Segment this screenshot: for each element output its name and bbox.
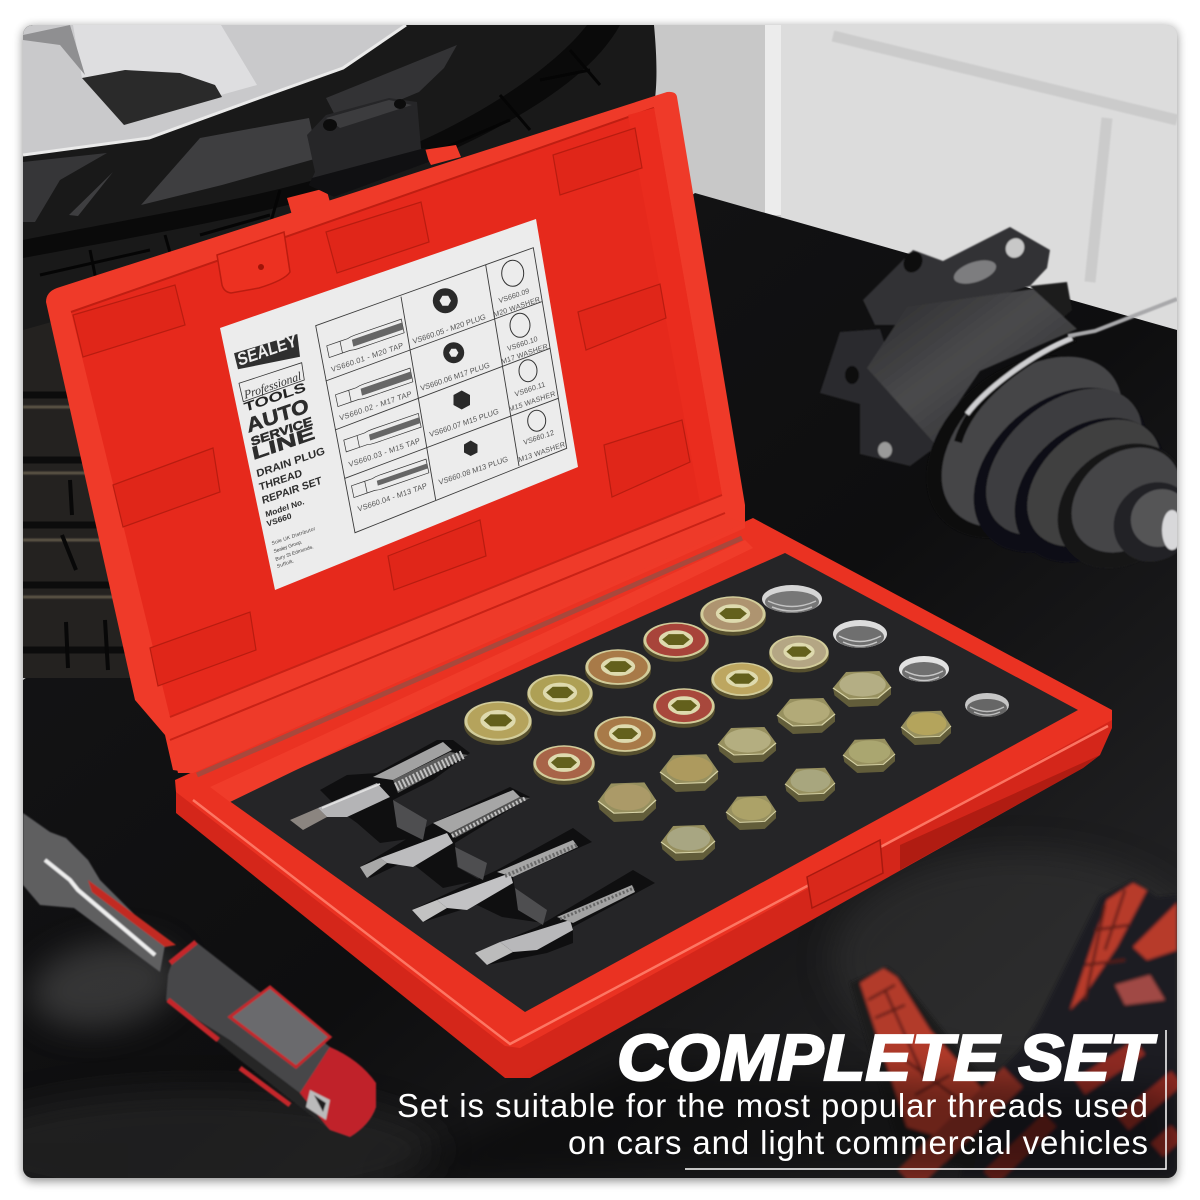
tyre and wheel bbox=[23, 25, 656, 678]
plug captions bbox=[412, 312, 509, 487]
description: on cars and light commercial vehicles bbox=[568, 1124, 1148, 1161]
tap captions: VS660.03 - M15 TAP bbox=[348, 436, 421, 469]
sidewall bands bbox=[141, 118, 318, 205]
product title: THREAD bbox=[258, 468, 304, 494]
tap 1 bbox=[290, 742, 468, 830]
washer captions: M13 WASHER bbox=[518, 439, 566, 464]
Auto Service Line logo bbox=[245, 395, 317, 464]
foam block faces bbox=[393, 800, 547, 925]
handle trim bbox=[168, 942, 290, 1105]
foam insert bbox=[228, 553, 1078, 1012]
distributor text: Sealey Group, bbox=[273, 539, 303, 555]
handle body bbox=[166, 942, 376, 1137]
upper flange bbox=[863, 227, 1050, 325]
red end cap bbox=[300, 1047, 376, 1137]
rim highlights bbox=[193, 726, 1108, 1044]
lower flange bbox=[820, 329, 937, 466]
distributor text bbox=[271, 526, 316, 570]
back flange bbox=[1030, 282, 1072, 320]
right rim highlight bbox=[628, 108, 722, 503]
base right shadow face bbox=[900, 755, 1100, 870]
steel band bbox=[958, 338, 1075, 442]
washer captions: VS660.09 bbox=[498, 286, 530, 305]
table bbox=[23, 193, 1177, 1178]
wrist band bbox=[907, 1077, 1013, 1180]
tap captions bbox=[330, 341, 428, 514]
right red latch stub bbox=[423, 145, 461, 165]
case base bbox=[175, 518, 1112, 1078]
washer captions: M17 WASHER bbox=[500, 341, 548, 366]
distributor text: Bury St Edmunds, bbox=[275, 544, 314, 563]
plug captions: VS660.08 M13 PLUG bbox=[438, 454, 509, 487]
palm knuckle bbox=[1115, 975, 1165, 1005]
plug drawings bbox=[433, 288, 478, 456]
right finger red bbox=[1070, 883, 1147, 1010]
gloves bbox=[850, 880, 1177, 1180]
tap 3 bbox=[412, 840, 578, 922]
palm strips bbox=[1080, 1047, 1177, 1150]
instruction label bbox=[220, 219, 578, 590]
left finger bbox=[850, 967, 990, 1170]
lid shell bbox=[46, 92, 745, 773]
tap pockets bbox=[320, 740, 655, 965]
rim step under lid bbox=[210, 540, 753, 802]
washer captions: VS660.11 bbox=[514, 379, 546, 399]
silver wheel bbox=[23, 25, 406, 155]
tap captions: VS660.02 - M17 TAP bbox=[339, 389, 412, 423]
taps bbox=[290, 742, 635, 965]
handle grip bbox=[230, 987, 330, 1067]
cable tie bbox=[1068, 299, 1177, 336]
label sheet bbox=[220, 219, 578, 590]
plug captions: VS660.05 - M20 PLUG bbox=[412, 312, 487, 346]
hex plugs bbox=[598, 671, 951, 861]
black clasp bbox=[307, 98, 429, 197]
housing bbox=[867, 289, 1077, 446]
plug captions: VS660.07 M15 PLUG bbox=[429, 407, 500, 439]
Professional Tools logo: Professional bbox=[242, 368, 303, 402]
product title: DRAIN PLUG bbox=[256, 446, 326, 480]
base rim top bbox=[175, 518, 1112, 1048]
base latch bbox=[807, 840, 883, 908]
distributor text: Sole UK Distributor bbox=[271, 526, 316, 547]
washer captions: M20 WASHER bbox=[493, 294, 541, 319]
rubber boot bbox=[931, 355, 1177, 562]
tap drawings bbox=[327, 319, 429, 499]
case lid bbox=[46, 92, 753, 802]
tap captions: VS660.04 - M13 TAP bbox=[357, 481, 428, 514]
socket plugs bbox=[464, 596, 829, 785]
base side face bbox=[176, 716, 1112, 1078]
washer drawings bbox=[502, 260, 546, 431]
end cap window bbox=[306, 1090, 330, 1120]
left finger red bbox=[860, 968, 983, 1137]
description: Set is suitable for the most popular threads used bbox=[397, 1087, 1148, 1124]
corner frame bbox=[685, 1030, 1166, 1169]
ratchet bbox=[23, 813, 376, 1137]
lid tab bbox=[217, 232, 290, 293]
handle lower dark bbox=[196, 1019, 328, 1128]
wall bbox=[654, 25, 1177, 330]
CV joint bbox=[820, 226, 1177, 562]
washer captions: M15 WASHER bbox=[508, 389, 556, 414]
Auto Service Line logo: SERVICE bbox=[249, 414, 314, 449]
Auto Service Line logo: AUTO bbox=[245, 395, 311, 438]
bottom-left table tone bbox=[23, 1090, 422, 1178]
caption shade bbox=[380, 1060, 1177, 1178]
lid recesses bbox=[73, 128, 690, 686]
tread lines bbox=[23, 25, 620, 258]
table sheen bbox=[836, 855, 1128, 1060]
tap 2 bbox=[360, 790, 530, 878]
Professional Tools logo bbox=[239, 363, 308, 415]
parts grid bbox=[316, 248, 567, 533]
SEALEY logo: SEALEY bbox=[236, 330, 298, 370]
thread holes bbox=[762, 585, 1009, 717]
washer captions: VS660.10 bbox=[506, 334, 538, 353]
tyre body bbox=[23, 25, 656, 330]
Professional Tools logo: TOOLS bbox=[243, 379, 308, 415]
washer captions: VS660.12 bbox=[523, 428, 555, 447]
hinge glass strip bbox=[197, 538, 742, 775]
washer captions bbox=[493, 286, 566, 464]
heading: COMPLETE SET bbox=[617, 1021, 1158, 1094]
glove palm bbox=[982, 881, 1177, 1178]
chrome head bbox=[23, 813, 165, 972]
product title: VS660 bbox=[266, 511, 293, 529]
description bbox=[397, 1087, 1148, 1161]
wheel window bbox=[82, 70, 222, 125]
Auto Service Line logo: LINE bbox=[250, 423, 317, 464]
ratchet reflection bbox=[24, 931, 186, 1039]
lid inner face bbox=[71, 108, 722, 717]
product title: Model No. bbox=[265, 497, 305, 519]
wheel spoke bbox=[73, 25, 257, 95]
chrome highlight bbox=[45, 860, 155, 955]
hinge step bbox=[170, 515, 745, 773]
cap window inner bbox=[314, 1095, 326, 1112]
wheel light rim bbox=[23, 25, 406, 155]
distributor text: Suffolk. bbox=[276, 558, 295, 570]
product title: REPAIR SET bbox=[261, 475, 323, 507]
red inlay bbox=[88, 880, 176, 947]
tap 4 bbox=[475, 885, 635, 965]
product title bbox=[256, 446, 326, 529]
tap captions: VS660.01 - M20 TAP bbox=[330, 341, 404, 374]
plug captions: VS660.06 M17 PLUG bbox=[420, 360, 491, 393]
third finger red bbox=[1133, 903, 1177, 960]
tread stack bbox=[23, 322, 130, 678]
left red latch stub bbox=[287, 188, 330, 215]
